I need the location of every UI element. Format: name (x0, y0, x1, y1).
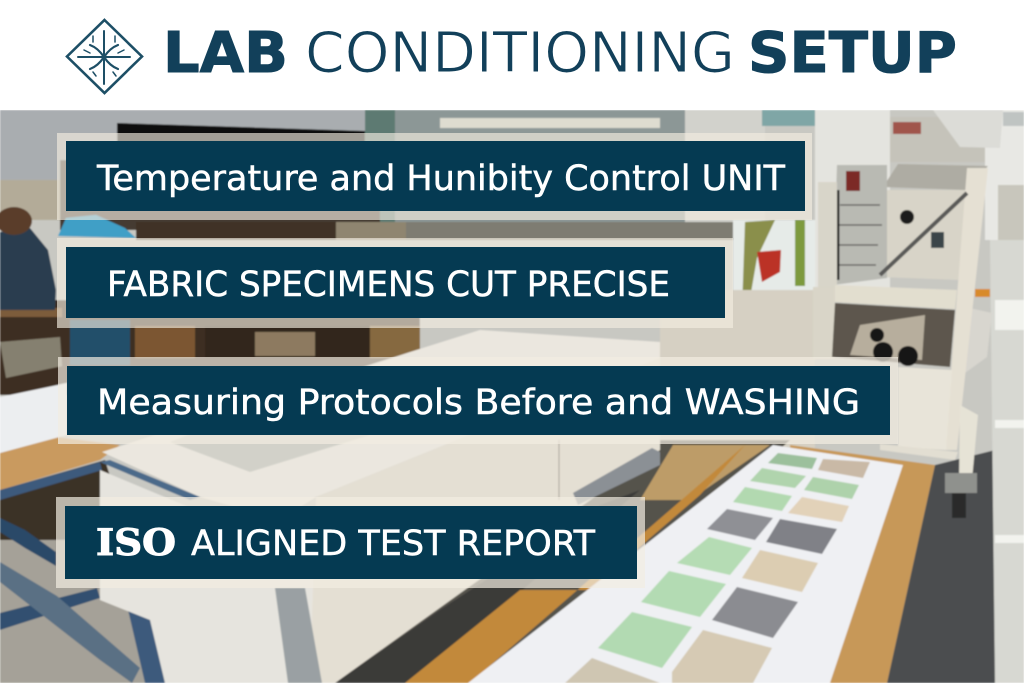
banner 1 fill (66, 141, 805, 211)
machine: base (880, 444, 958, 460)
machine: diagonal strut (880, 193, 967, 275)
white cabinet left face (100, 470, 325, 683)
header band (0, 0, 1024, 110)
machine: inner back panel (878, 190, 967, 280)
machine: black discs (870, 328, 918, 366)
dark floor wedge (335, 490, 640, 683)
fabric swatches (565, 453, 870, 683)
cabinet rail (573, 448, 660, 505)
wooden table top (0, 437, 120, 490)
far cabinets right (985, 110, 1024, 240)
title text (163, 21, 957, 86)
banner 1 text: Temperature and Hunibity Control UNIT (96, 159, 786, 199)
white paper on table (0, 383, 67, 453)
banner 4 frame (56, 497, 645, 588)
white cabinet right face (310, 358, 660, 683)
metal corner strip (275, 588, 322, 683)
back wall left (0, 110, 370, 185)
dark floor right (887, 450, 995, 683)
white paper sheet (468, 445, 903, 683)
banner 3 (58, 357, 898, 444)
machine: orange tag (975, 289, 990, 297)
cabinet top surface (102, 330, 660, 520)
floor bottom left (0, 540, 300, 683)
orange wood floor (405, 445, 745, 683)
machine: upper left post (818, 182, 837, 287)
machine: far ceiling equipment (890, 110, 1003, 162)
banner 4 (56, 497, 645, 588)
machine: light material patch (850, 315, 925, 360)
left bench equipment (0, 160, 736, 240)
machine: plastic stack details (836, 190, 882, 280)
machine: small screen (931, 232, 944, 248)
shelving behind cabinet (0, 300, 420, 395)
dark ceiling edge (117, 123, 365, 160)
banner 4 ISO text: ISO (96, 522, 176, 564)
tan floor gloss (640, 445, 770, 500)
blue sleeve (58, 215, 136, 238)
right wooden ruler strip (790, 445, 935, 683)
machine: round port (900, 210, 914, 224)
banner 2 fill (66, 247, 725, 318)
floor reflections (995, 300, 1024, 543)
machine: foot (945, 473, 977, 518)
title logo icon (67, 20, 142, 93)
banner 2 (57, 238, 733, 328)
machine: left plastic stack (833, 165, 887, 285)
title word CONDITIONING: CONDITIONING (305, 21, 735, 86)
title word SETUP: SETUP (748, 21, 957, 86)
machine: red control box (846, 171, 860, 191)
machine: right post (945, 168, 988, 450)
under-table dark area (0, 460, 130, 540)
machine: shelf (835, 285, 957, 309)
banner 3 frame (58, 357, 898, 444)
person in navy shirt (0, 207, 56, 310)
banner 1 (57, 133, 812, 220)
banner 3 text: Measuring Protocols Before and WASHING (97, 383, 860, 423)
glass plate on cabinet (170, 425, 370, 472)
machine: lower cabinet (898, 367, 952, 450)
back room upper centre (365, 110, 890, 290)
title word LAB: LAB (163, 21, 288, 86)
banner 4 text: ALIGNED TEST REPORT (191, 524, 596, 564)
banner 1 frame (57, 133, 812, 220)
floor behind cabinet (300, 440, 790, 683)
banner 2 frame (57, 238, 733, 328)
machine: under shelf cavity (832, 303, 955, 367)
machine: right side panel (965, 307, 992, 373)
banner 4 fill (65, 506, 637, 579)
machine: lower left post (813, 287, 835, 359)
blue table frame (0, 462, 166, 683)
centre back floor and wall (660, 220, 815, 450)
cabinet seam (558, 440, 560, 500)
blue cabinet edge (100, 460, 200, 500)
light floor right (990, 240, 1024, 683)
banner 3 fill (67, 366, 890, 435)
banner 2 text: FABRIC SPECIMENS CUT PRECISE (107, 265, 670, 305)
machine: leg (959, 405, 978, 480)
machine: silver top slab (883, 164, 988, 190)
